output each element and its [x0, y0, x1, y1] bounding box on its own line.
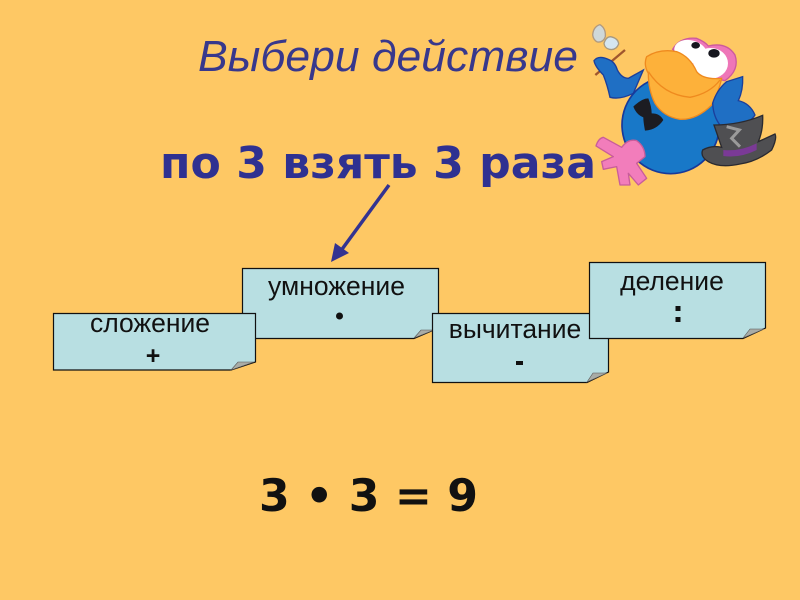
card: умножение: умножение: [268, 271, 405, 301]
icon: right wing: [713, 77, 755, 125]
task heading: по 3 взять 3 раза: [160, 138, 596, 189]
card: сложение: сложение: [90, 308, 210, 338]
icon: pink foot: [596, 137, 647, 185]
icon: stick with marshmallows: [593, 25, 625, 75]
card: деление: [590, 262, 766, 338]
icon: left wing: [594, 57, 643, 98]
card: сложение: +: [146, 342, 160, 370]
card: деление: деление: [620, 266, 724, 296]
icon: hat: [702, 115, 776, 166]
card: вычитание: вычитание: [449, 314, 581, 344]
icon: body: [622, 76, 719, 174]
icon: eyes: [672, 36, 736, 81]
icon: bird character: [593, 25, 776, 185]
icon: beak: [645, 51, 722, 119]
icon: bow tie: [633, 98, 663, 131]
arrow: [331, 185, 389, 262]
title: Выбери действие: [198, 32, 578, 81]
card: вычитание: [432, 314, 608, 382]
card: умножение: [242, 268, 438, 338]
card: сложение: [54, 308, 256, 370]
equation: 3 • 3 = 9: [259, 471, 478, 522]
